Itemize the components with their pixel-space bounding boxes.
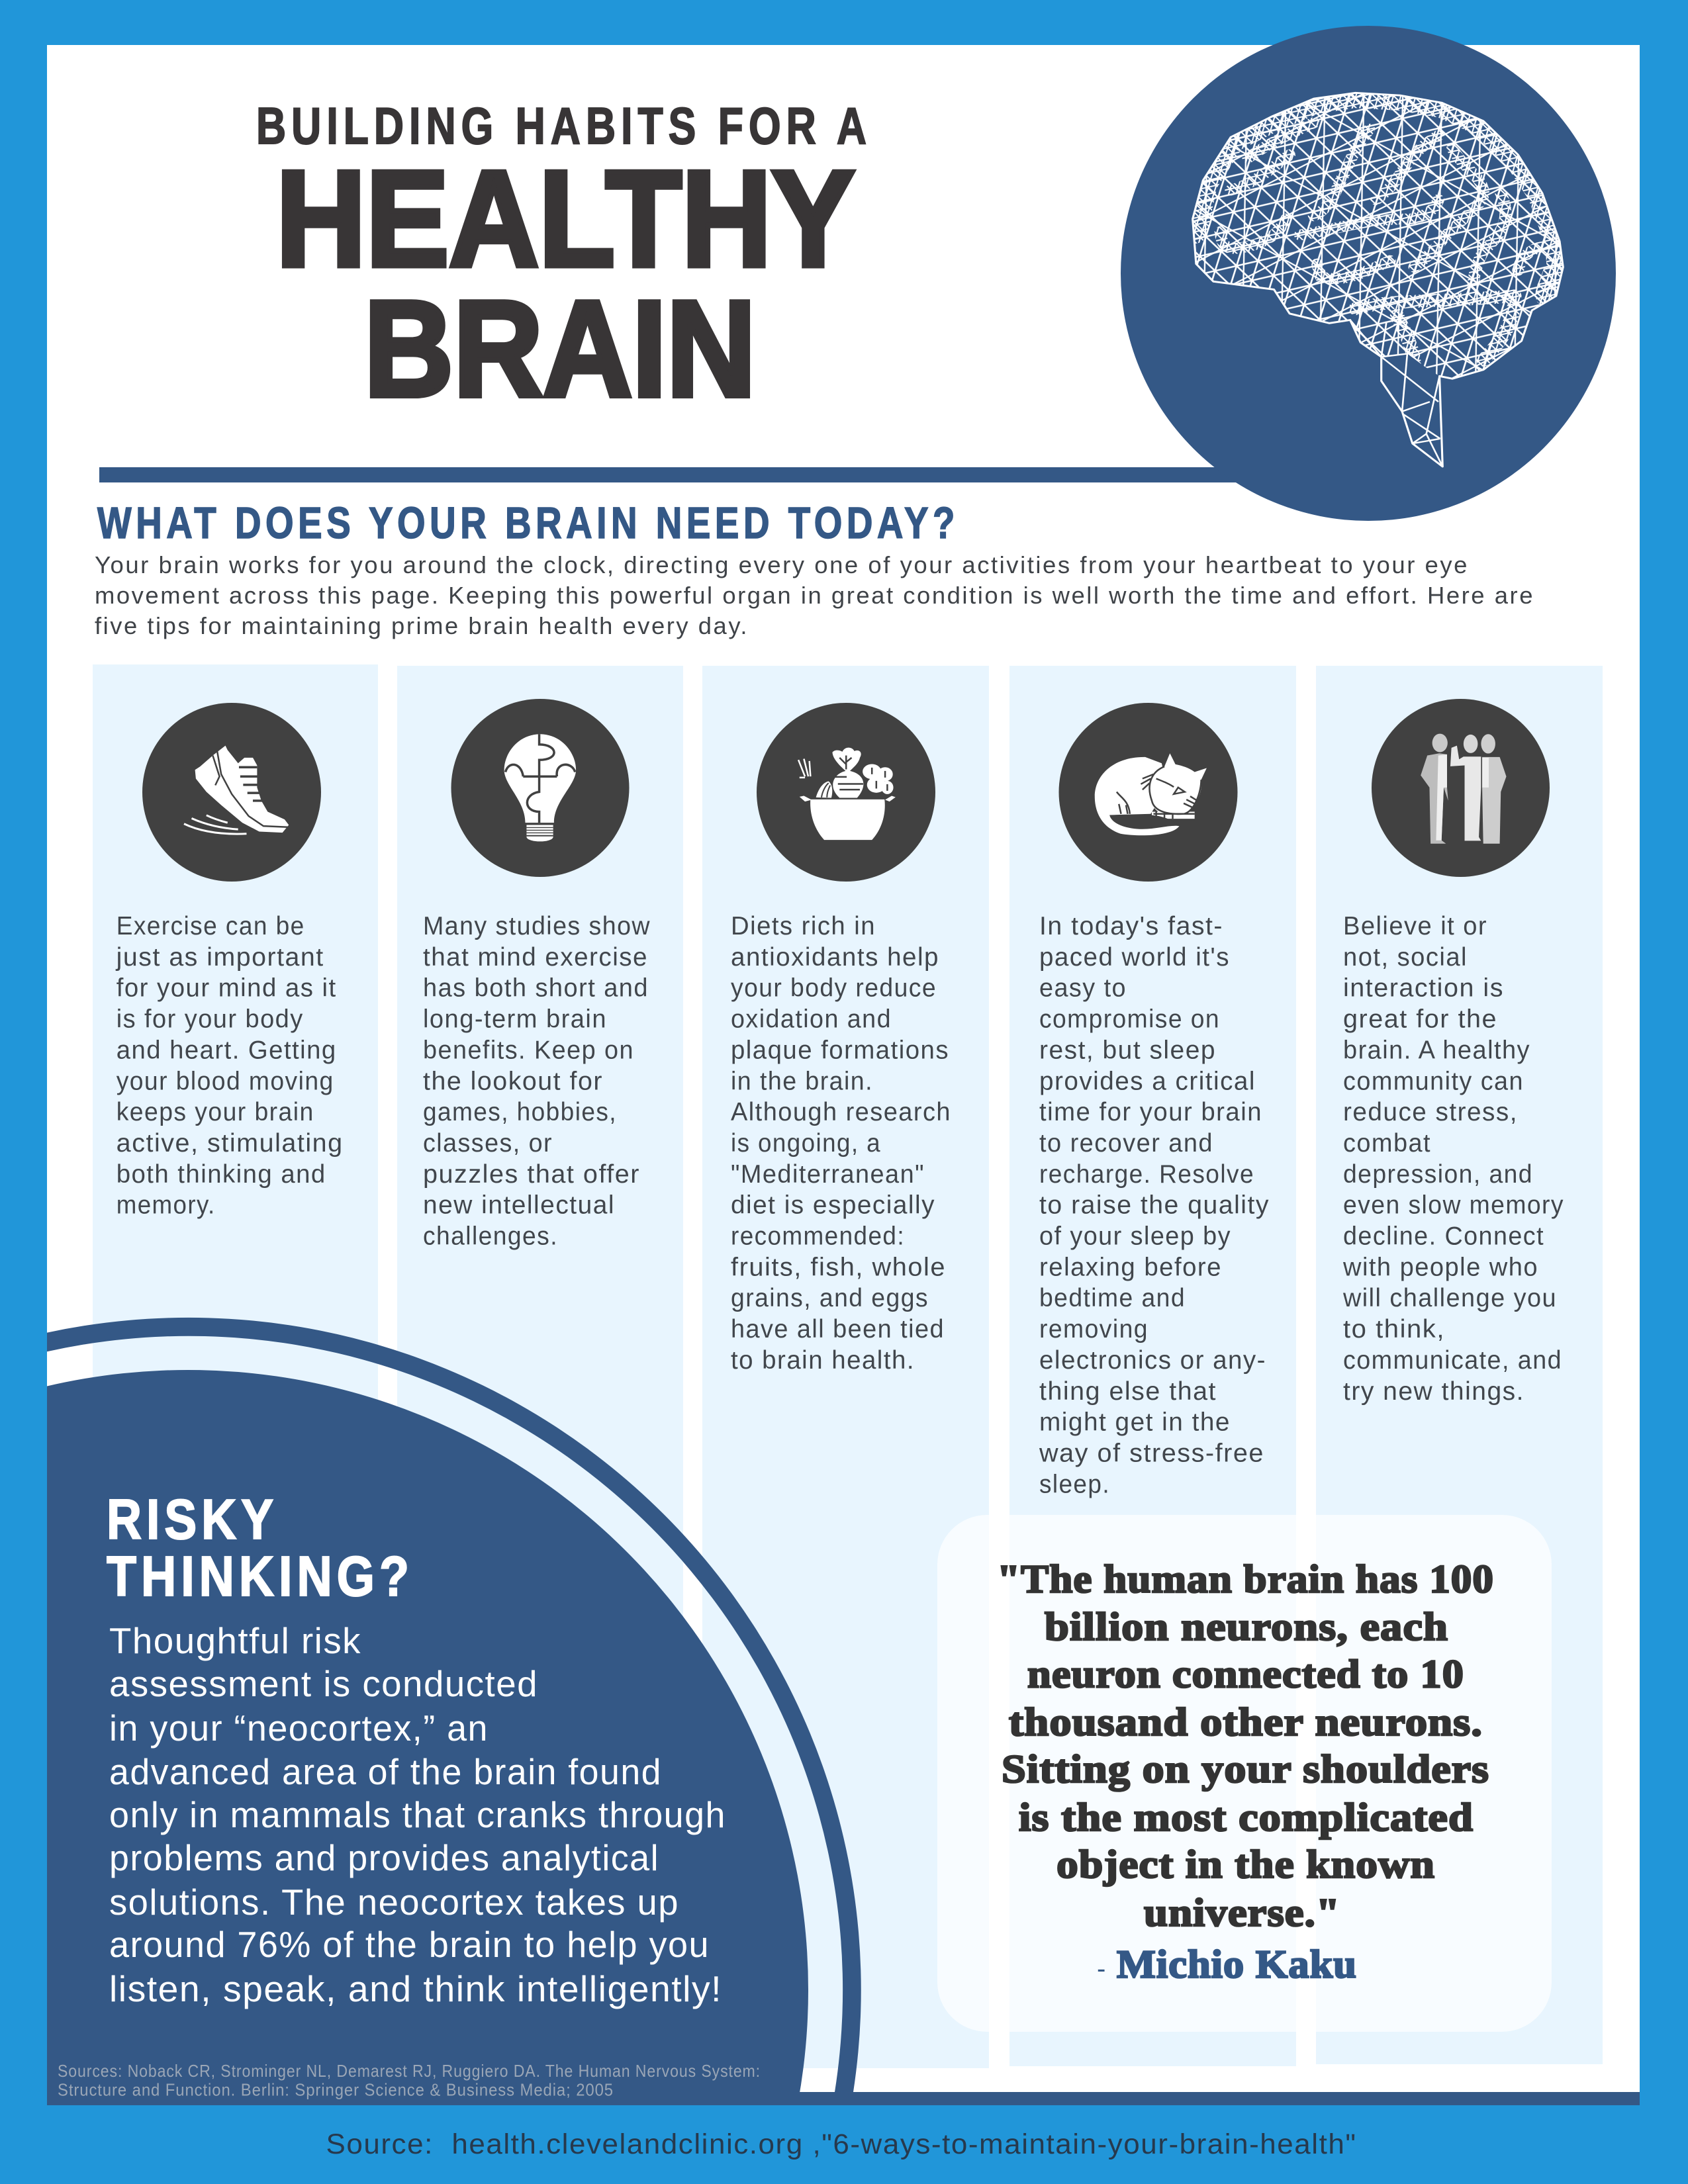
icon: wireframe brain <box>1189 91 1567 467</box>
tip text: thing else that <box>1039 1377 1217 1406</box>
sources note <box>58 2061 761 2099</box>
risky thinking text: Thoughtful risk <box>109 1620 361 1661</box>
tip text: Believe it or <box>1343 912 1487 940</box>
column background <box>397 666 683 2068</box>
tip text: fruits, fish, whole <box>731 1253 946 1281</box>
tip text: in the brain. <box>731 1067 873 1095</box>
tip text: sleep. <box>1039 1470 1110 1498</box>
tip text: to recover and <box>1039 1129 1213 1158</box>
risky thinking heading <box>107 1488 414 1608</box>
risky thinking text: assessment is conducted <box>109 1663 538 1704</box>
tip text: communicate, and <box>1343 1346 1562 1375</box>
tip text <box>731 912 951 1375</box>
tip text <box>1039 912 1270 1498</box>
tip text: your body reduce <box>731 974 937 1003</box>
tip text: diet is especially <box>731 1191 935 1220</box>
panel: social tip <box>1316 666 1603 2064</box>
tip text: memory. <box>117 1191 216 1220</box>
quote text: thousand other neurons. <box>1009 1700 1483 1744</box>
tip text: bedtime and <box>1039 1284 1186 1312</box>
intro paragraph: five tips for maintaining prime brain health every day. <box>95 612 749 639</box>
icon: puzzle light bulb <box>451 699 629 877</box>
quote attribution: - <box>1097 1954 1105 1983</box>
quote text: neuron connected to 10 <box>1027 1652 1464 1696</box>
tip text: brain. A healthy <box>1343 1036 1530 1064</box>
intro paragraph: Your brain works for you around the clock, directing every one of your activities from your heartbeat to your eye <box>95 551 1469 578</box>
risky thinking text: problems and provides analytical <box>109 1837 659 1878</box>
column background <box>1009 666 1296 2066</box>
tip text: rest, but sleep <box>1039 1036 1216 1064</box>
column background <box>1316 666 1603 2064</box>
tip text: Diets rich in <box>731 912 876 940</box>
quote text: Sitting on your shoulders <box>1002 1747 1489 1791</box>
quote text: billion neurons, each <box>1045 1605 1448 1649</box>
tip text: time for your brain <box>1039 1098 1262 1126</box>
quote background <box>937 1515 1552 2032</box>
tip text: classes, or <box>423 1129 553 1158</box>
tip text: great for the <box>1343 1005 1497 1034</box>
risky thinking heading: RISKY <box>107 1488 278 1551</box>
tip text: relaxing before <box>1039 1253 1222 1281</box>
decorative ring <box>47 1318 861 2092</box>
tip text <box>1342 912 1564 1406</box>
tip text: Exercise can be <box>117 912 305 940</box>
tip text: challenges. <box>423 1222 558 1251</box>
quote text: is the most complicated <box>1019 1796 1474 1839</box>
header rule <box>99 467 1291 482</box>
tip text: plaque formations <box>731 1036 949 1064</box>
risky thinking text: in your “neocortex,” an <box>109 1707 489 1749</box>
panel: mind exercise tip <box>397 666 683 2068</box>
tip text: and heart. Getting <box>117 1036 337 1064</box>
tip text: removing <box>1039 1315 1149 1343</box>
icon: running shoe <box>142 703 321 882</box>
icon: pot of vegetables <box>757 703 935 882</box>
tip text: that mind exercise <box>423 943 648 972</box>
tip text: "Mediterranean" <box>731 1160 925 1189</box>
risky thinking text: solutions. The neocortex takes up <box>109 1882 679 1923</box>
title line 1: BUILDING HABITS FOR A <box>256 97 872 155</box>
emblem circle <box>1121 26 1616 521</box>
title line 3: BRAIN <box>364 273 756 425</box>
tip text: the lookout for <box>423 1067 603 1095</box>
quarter circle background <box>47 1370 808 2105</box>
tip text: your blood moving <box>117 1067 334 1095</box>
icon: group of people <box>1372 699 1550 877</box>
quote text <box>997 1557 1494 1934</box>
column background <box>93 664 378 2068</box>
tip text: games, hobbies, <box>423 1098 617 1126</box>
quote attribution: Michio Kaku <box>1117 1942 1357 1986</box>
tip text: to think, <box>1343 1315 1445 1343</box>
tip text: might get in the <box>1039 1408 1231 1437</box>
intro paragraph: movement across this page. Keeping this powerful organ in great condition is well worth the time and effort. Here are <box>95 582 1534 609</box>
sources note: Sources: Noback CR, Strominger NL, Demarest RJ, Ruggiero DA. The Human Nervous System: <box>58 2061 761 2081</box>
icon: sleeping cat <box>1059 703 1238 882</box>
tip text: keeps your brain <box>117 1098 314 1126</box>
tip text: just as important <box>116 943 324 972</box>
title <box>256 97 872 425</box>
tip text: community can <box>1343 1067 1524 1095</box>
risky thinking text: around 76% of the brain to help you <box>109 1924 710 1965</box>
tip text: grains, and eggs <box>731 1284 929 1312</box>
tip text: will challenge you <box>1342 1284 1557 1312</box>
sources note: Structure and Function. Berlin: Springer Science & Business Media; 2005 <box>58 2079 614 2099</box>
tip text: decline. Connect <box>1343 1222 1544 1251</box>
tip text: Although research <box>731 1098 951 1126</box>
bottom rule <box>47 2092 1640 2105</box>
risky thinking text: only in mammals that cranks through <box>109 1794 726 1835</box>
tip text: active, stimulating <box>117 1129 344 1158</box>
tip text: benefits. Keep on <box>423 1036 634 1064</box>
tip text: puzzles that offer <box>423 1160 640 1189</box>
panel: diet tip <box>702 666 989 2068</box>
tip text: depression, and <box>1343 1160 1533 1189</box>
quote text: universe." <box>1144 1891 1340 1934</box>
tip text: combat <box>1343 1129 1431 1158</box>
tip text: is for your body <box>117 1005 304 1034</box>
tip text: way of stress-free <box>1039 1439 1264 1468</box>
title line 2: HEALTHY <box>276 143 855 295</box>
tip text: even slow memory <box>1343 1191 1564 1220</box>
tip text: antioxidants help <box>731 943 939 972</box>
section heading: WHAT DOES YOUR BRAIN NEED TODAY? <box>97 498 959 548</box>
footer source line: Source: health.clevelandclinic.org ,"6-ways-to-maintain-your-brain-health" <box>326 2128 1357 2160</box>
tip text: with people who <box>1342 1253 1538 1281</box>
tip text: have all been tied <box>731 1315 945 1343</box>
tip text: to brain health. <box>731 1346 915 1375</box>
tip text: has both short and <box>423 974 649 1003</box>
tip text: recharge. Resolve <box>1039 1160 1254 1189</box>
panel: risky thinking <box>47 1318 861 2105</box>
risky thinking heading: THINKING? <box>107 1545 414 1608</box>
intro paragraph <box>95 551 1534 639</box>
tip text: compromise on <box>1039 1005 1220 1034</box>
tip text: paced world it's <box>1039 943 1230 972</box>
tip text: easy to <box>1039 974 1127 1003</box>
tip text: provides a critical <box>1039 1067 1256 1095</box>
quote text: object in the known <box>1056 1843 1435 1886</box>
tip text: both thinking and <box>117 1160 326 1189</box>
tip text: electronics or any- <box>1039 1346 1266 1375</box>
tip text: reduce stress, <box>1343 1098 1518 1126</box>
tip text <box>423 912 651 1251</box>
brain emblem <box>1121 26 1616 521</box>
tip text <box>116 912 344 1220</box>
tip text: recommended: <box>731 1222 905 1251</box>
risky thinking text: listen, speak, and think intelligently! <box>109 1968 722 2009</box>
panel: sleep tip <box>1009 666 1296 2066</box>
tip text: is ongoing, a <box>731 1129 881 1158</box>
tip text: not, social <box>1343 943 1468 972</box>
risky thinking text: advanced area of the brain found <box>109 1751 662 1792</box>
tip text: to raise the quality <box>1039 1191 1270 1220</box>
tip text: new intellectual <box>423 1191 615 1220</box>
risky thinking text <box>109 1620 726 2009</box>
tip text: of your sleep by <box>1039 1222 1231 1251</box>
panel: exercise tip <box>93 664 378 2068</box>
quote text: "The human brain has 100 <box>997 1557 1494 1601</box>
column background <box>702 666 989 2068</box>
tip text: long-term brain <box>423 1005 607 1034</box>
tip text: try new things. <box>1343 1377 1524 1406</box>
tip text: interaction is <box>1343 974 1504 1003</box>
tip text: for your mind as it <box>117 974 337 1003</box>
tip text: oxidation and <box>731 1005 892 1034</box>
tip text: In today's fast- <box>1039 912 1223 940</box>
panel: quote <box>937 1515 1552 2032</box>
tip text: Many studies show <box>423 912 651 940</box>
